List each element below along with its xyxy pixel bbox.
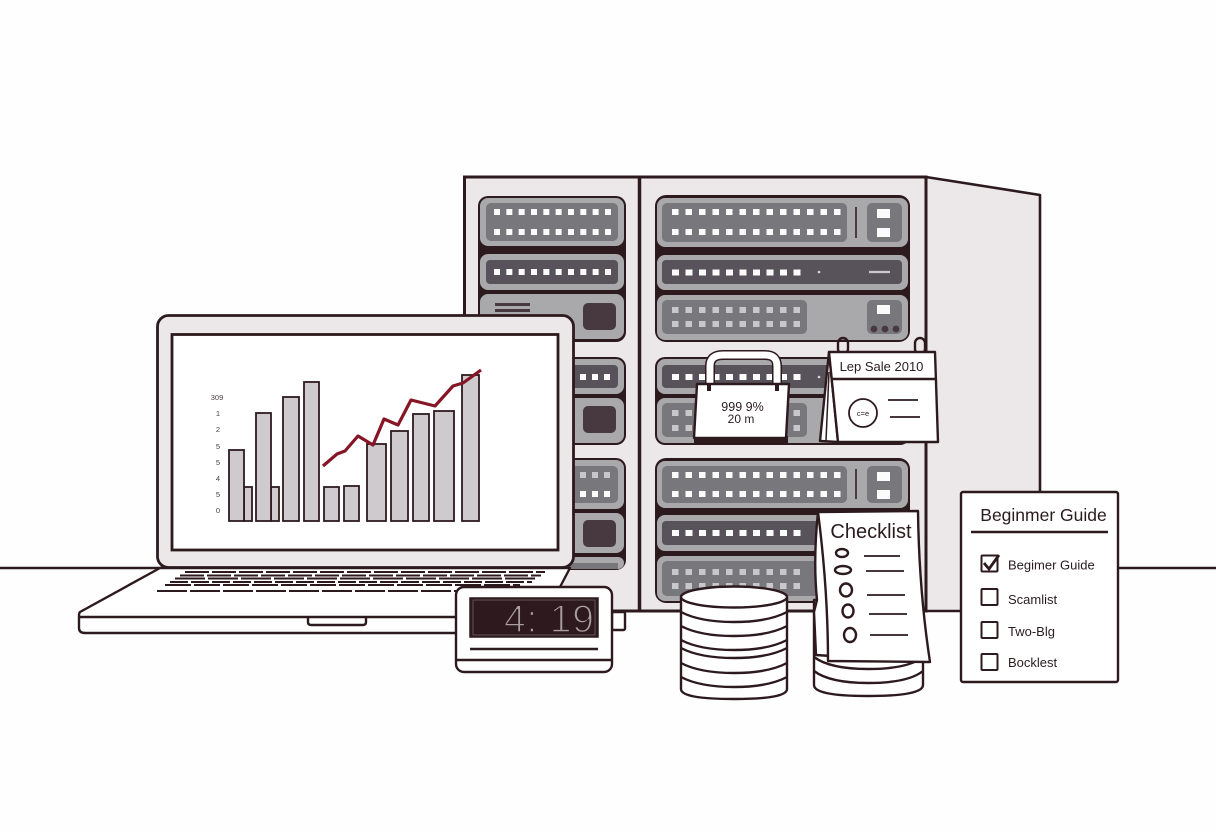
beginner guide card [961,492,1118,682]
axis labels: 4 [216,474,220,483]
front page [818,511,930,662]
unchecked item 2 [982,622,1055,639]
unchecked item 2: Two-Blg [1008,624,1055,639]
clock time: 4: 19 [504,598,594,641]
axis labels: 2 [216,425,220,434]
laptop screen [172,334,558,550]
stack of discs [681,586,787,699]
axis labels: 5 [216,458,220,467]
unchecked item 3: Bocklest [1008,655,1058,670]
axis labels: 5 [216,490,220,499]
axis labels: 0 [216,506,220,515]
second disc stack [814,600,923,696]
checklist title: Checklist [830,521,912,543]
back page [814,512,831,656]
bars [229,375,479,521]
clock knob [612,612,625,630]
axis labels: 5 [216,442,220,451]
clock body [456,587,612,672]
calendar clock icon: c=e [857,409,869,418]
padlock body [694,384,789,438]
left column server group 1 [478,196,626,342]
padlock tag: 20 m [728,412,754,426]
trackpad notch [308,617,366,625]
desk calendar [820,338,938,442]
unchecked item 1 [982,589,1058,607]
unchecked item 1: Scamlist [1008,592,1058,607]
padlock shackle [710,355,777,385]
checked item: Begimer Guide [1008,558,1095,572]
calendar back pages [820,352,838,442]
laptop lid [158,316,574,568]
right column server group 3 [655,458,910,603]
laptop [79,316,574,633]
checklist items [835,549,908,642]
axis labels [211,393,223,515]
calendar sheet [829,352,938,442]
axis labels: 309 [211,393,223,402]
left column server group 2 [478,357,626,445]
floor line [0,567,1216,569]
rack side panel [926,177,1040,611]
digital clock [456,587,625,672]
padlock base shadow [694,436,788,443]
padlock tag [694,355,789,443]
axis labels: 1 [216,409,220,418]
right column server group 2 [655,357,910,445]
keyboard [157,572,545,591]
checklist note [814,511,930,662]
bar chart [211,370,481,521]
calendar title: Lep Sale 2010 [840,359,923,374]
padlock text: 999 9% [721,400,764,414]
card title: Beginmer Guide [980,505,1107,525]
laptop base [79,568,570,633]
checked item [982,555,1095,572]
clock display [470,598,598,637]
unchecked item 3 [982,654,1058,670]
left column server group 3 [478,458,626,570]
server rack [464,177,1040,611]
calendar rings [838,338,848,354]
trend line [323,370,481,466]
rack front frame [464,177,926,611]
right column server group 1 [655,195,910,342]
